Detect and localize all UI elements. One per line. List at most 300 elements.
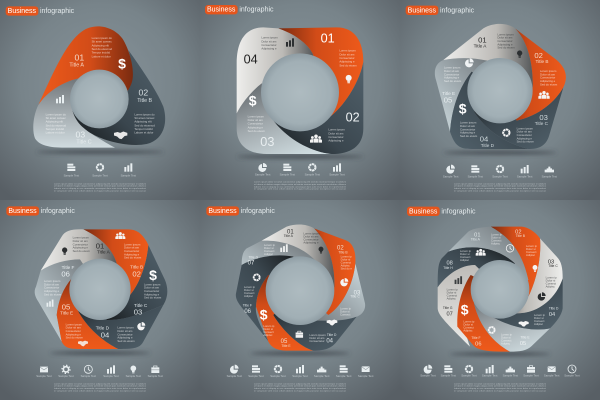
footer item 6 <box>523 366 539 378</box>
text block 01: Sed do eiusm <box>339 63 357 67</box>
segment 07 white <box>438 265 500 347</box>
footer paragraph: laboris nisi ut aliquip ex ea commodo consequat duis aute irure dolor in reprehenderit <box>454 387 546 390</box>
footer item 1: Sample Text <box>36 374 52 378</box>
panel background <box>0 0 200 200</box>
label 03 Title C: 03 <box>354 290 361 296</box>
label 04 Title D: Title D <box>96 326 110 331</box>
text block 03: Consectetur <box>144 289 159 293</box>
ground shadow <box>250 352 350 355</box>
icon: handshake <box>78 341 88 346</box>
label 02 Title B <box>515 229 526 238</box>
footer item 2: Sample Text <box>468 174 483 178</box>
text block 03: Lorem ip <box>546 276 557 280</box>
segment 02 orange <box>83 229 148 295</box>
label 03 Title C: 03 <box>548 259 554 265</box>
panel: heptagon diagram <box>200 200 400 400</box>
text block 03: Lorem ipsum <box>248 114 265 118</box>
footer paragraph: in voluptate velit esse cillum dolore eu fugiat nulla pariatur excepteur sint occaecat <box>454 389 546 392</box>
text block 02: Consectetur <box>124 249 139 253</box>
footer item 2 <box>280 164 295 177</box>
text block 06: Dolor si <box>463 323 473 327</box>
footer item 1: Sample Text <box>64 173 79 177</box>
footer item 7 <box>358 366 374 378</box>
text block 06: Dolor si <box>244 288 254 292</box>
footer item 4: Sample Text <box>292 374 308 378</box>
text block B: Labore et dolor <box>134 131 153 135</box>
label 02 Title B <box>534 51 549 64</box>
center hole <box>261 53 339 131</box>
label 05 Title E <box>442 91 455 105</box>
text block 04: Dolor sit am <box>117 329 133 333</box>
segment 05 light blue <box>474 289 550 352</box>
label 02 Title B: Title B <box>137 98 153 104</box>
text block 06: Lorem ip <box>463 320 475 324</box>
text block 02: Sed do e <box>341 266 352 270</box>
segment 03 light <box>300 263 365 321</box>
icon: donut <box>489 327 495 333</box>
text block 01: Consectetur <box>73 242 88 246</box>
text block 08: Adipisc <box>460 258 470 262</box>
text block 04: Dolor sit am <box>261 39 277 43</box>
label 03 Title C: Title C <box>548 264 558 268</box>
text block 06: Adipisc <box>463 329 473 333</box>
segment 06 dark <box>236 255 300 343</box>
header: Business infographic <box>205 5 274 14</box>
label 03 Title C: 03 <box>539 113 548 122</box>
label 04 Title D: 04 <box>101 330 110 339</box>
header: Business infographic: infographic <box>41 208 75 215</box>
label 01 Title A <box>69 53 84 69</box>
text block 08: Dolor si <box>460 252 470 256</box>
header: Business infographic: infographic <box>40 8 75 15</box>
label 03 Title C <box>134 303 148 317</box>
text block C: Labore et dolor <box>46 131 65 135</box>
icon: case <box>296 331 303 338</box>
label 01 Title A: 01 <box>75 53 84 63</box>
text block 02: Dolor si <box>341 257 351 261</box>
text block 07: Dolor si <box>447 290 457 294</box>
footer paragraph: ut labore et dolore magna aliqua enim ad minim veniam quis nostrud exercitation ullamco <box>454 185 547 188</box>
text block 05: Consectetur <box>66 329 81 333</box>
footer item 3 <box>81 365 96 378</box>
label 06 Title F: 06 <box>61 270 70 279</box>
segment 01 orange <box>278 27 363 116</box>
text block 07: Consect <box>447 293 457 297</box>
footer item 1: Sample Text <box>255 173 271 177</box>
footer paragraph: ut labore et dolore magna aliqua enim ad minim veniam quis nostrud exercitation ullamco <box>254 385 347 388</box>
icon: donut <box>503 129 509 136</box>
segment 05 orange <box>256 275 313 351</box>
text block C: Sit amet consec <box>46 116 66 120</box>
text block 04: Dolor sit am <box>309 336 325 340</box>
icon: chart <box>47 300 53 307</box>
label 01 Title A <box>284 229 294 238</box>
header: Business infographic <box>6 6 75 16</box>
label 02 Title B <box>137 88 153 104</box>
footer paragraph: ut labore et dolore magna aliqua enim ad minim veniam quis nostrud exercitation ullamco <box>54 385 147 388</box>
footer item 4: Sample Text <box>517 174 533 178</box>
label 01 Title A <box>96 242 111 255</box>
text block 06: Consectetur <box>44 286 59 290</box>
segment 05 orange <box>57 278 118 349</box>
footer paragraph: laboris nisi ut aliquip ex ea commodo consequat duis aute irure dolor in reprehenderit <box>54 187 146 190</box>
footer item 4 <box>292 365 308 378</box>
text block 03: Adipisc <box>546 285 555 289</box>
text block A: Sed do eiusmod <box>92 47 113 51</box>
label 01 Title A: Title A <box>474 44 487 49</box>
footer item 5 <box>314 367 330 378</box>
text block 02: Sed do eiusm <box>540 82 558 86</box>
text block 06: Lorem ipsum <box>44 279 61 283</box>
label 01 Title A: Title A <box>471 237 481 241</box>
label 04 Title D <box>96 326 110 339</box>
text block 06: Adipiscing e <box>44 289 60 293</box>
text block 02: Consectetur <box>328 135 344 139</box>
label 02 Title B: Title B <box>535 59 549 64</box>
panel: hexagon diagram <box>0 200 200 400</box>
footer item 4: Sample Text <box>103 374 119 378</box>
label 07 Title G: Title G <box>443 306 453 310</box>
footer paragraph: laboris nisi ut aliquip ex ea commodo consequat duis aute irure dolor in reprehenderit <box>254 387 346 390</box>
center hole <box>467 58 533 123</box>
icon: pie <box>465 58 474 67</box>
footer item 5 <box>126 365 141 378</box>
icon: chart dark <box>455 276 462 284</box>
footer item 2 <box>248 365 264 378</box>
text block 01: Lorem ipsum <box>73 236 90 240</box>
label 02 Title B: 02 <box>534 51 543 60</box>
footer item 1: Sample Text <box>227 374 242 378</box>
label 01 Title A: 01 <box>287 229 294 235</box>
footer item 1 <box>64 164 79 177</box>
label 07 Title G <box>248 256 259 266</box>
text block 05: Dolor sit am <box>66 326 81 330</box>
label 02: 02 <box>346 111 360 125</box>
icon: pie <box>340 278 348 286</box>
label 07 Title G: 07 <box>447 311 453 317</box>
center hole <box>266 256 334 325</box>
footer item 8: Sample Text <box>564 374 580 378</box>
text block 03: Dolor sit am <box>248 118 263 122</box>
segment 01 white <box>41 229 117 289</box>
footer item 1: Sample Text <box>443 174 459 178</box>
footer item 8 <box>564 365 580 378</box>
icon: people <box>538 91 550 99</box>
text block 05: Lorem ip <box>501 332 512 336</box>
segment 01 white <box>443 24 533 91</box>
footer paragraph: ut labore et dolore magna aliqua enim ad minim veniam quis nostrud exercitation ullamco <box>54 185 147 188</box>
icon: dollar: $ <box>149 267 157 283</box>
footer paragraph: Lorem ipsum dolor sit amet consectetur adipiscing elit sed do eiusmod tempor incididunt <box>54 382 146 385</box>
label 06 Title F: Title F <box>62 265 75 270</box>
icon: chart dark <box>286 38 294 47</box>
text block 05: Consect <box>263 330 274 334</box>
text block 02: Dolor si <box>526 247 536 251</box>
header: Business infographic: Business <box>8 208 37 215</box>
label 02 Title B: 02 <box>515 229 521 235</box>
icon: donut <box>254 274 260 280</box>
center hole <box>471 260 529 319</box>
icon: people <box>476 249 486 256</box>
header: Business infographic <box>406 6 475 15</box>
icon: bulb dark <box>62 247 67 255</box>
text block 01: Lorem ipsum <box>303 231 320 235</box>
footer item 2: Sample Text <box>92 173 108 177</box>
text block 02: Dolor sit am <box>124 246 140 250</box>
segment 05 light <box>435 58 500 132</box>
text block 07: Adipisc <box>447 296 456 300</box>
header: Business infographic: Business <box>8 8 37 15</box>
icon: handshake <box>519 321 529 327</box>
text block 05: Adipisc <box>263 333 273 337</box>
segment 04 dark <box>78 289 163 349</box>
panel background <box>200 200 400 400</box>
text block 05: Lorem ipsum <box>66 322 83 326</box>
text block B: Sit amet consec <box>134 116 155 120</box>
panel: pentagon diagram <box>400 0 600 200</box>
icon: people <box>115 232 125 239</box>
ground shadow <box>450 352 550 356</box>
ground shadow <box>443 151 557 154</box>
label 07 Title G: 07 <box>248 260 255 266</box>
footer paragraph: ut labore et dolore magna aliqua enim ad minim veniam quis nostrud exercitation ullamco <box>254 183 347 186</box>
text block 05: Dolor si <box>263 327 273 331</box>
footer item 1 <box>227 365 242 378</box>
text block A: Lorem ipsum do <box>92 36 112 40</box>
label 07 Title G: Title G <box>248 256 259 260</box>
text block 07: Dolor si <box>264 246 274 250</box>
label 06 Title F <box>243 304 252 315</box>
text block 03: Lorem ip <box>340 306 351 310</box>
footer paragraph: ut labore et dolore magna aliqua enim ad minim veniam quis nostrud exercitation ullamco <box>454 385 547 388</box>
text block 04: Adipiscing e <box>117 336 133 340</box>
label 07 Title G <box>443 306 453 317</box>
label 01: 01 <box>321 31 335 45</box>
text block A: Labore et dolor <box>92 54 111 58</box>
text block 03: Sed do eiusm <box>517 140 535 144</box>
label 05 Title E: Title E <box>60 311 73 316</box>
label 04 Title D: Title D <box>481 143 495 148</box>
text block 02: Dolor sit am <box>540 72 556 76</box>
label 04: 04 <box>244 52 258 66</box>
text block 05: Lorem ipsum <box>444 66 461 70</box>
segment 04 dark <box>478 278 563 329</box>
footer item 5 <box>503 367 518 378</box>
footer item 1 <box>443 165 459 178</box>
text block 03: Sed do eiusm <box>248 129 266 133</box>
header: Business infographic: infographic <box>441 208 476 215</box>
icon: dollar: $ <box>461 302 469 318</box>
footer item 4 <box>517 165 533 178</box>
label 01 Title A <box>471 233 481 241</box>
text block 06: Lorem ip <box>244 285 255 289</box>
header: Business infographic: infographic <box>241 208 275 215</box>
segment 06 grey <box>35 259 100 342</box>
label 03 Title C: Title C <box>535 121 549 126</box>
label 01 Title A: 01 <box>478 36 487 45</box>
text block 05: Consect <box>501 338 512 342</box>
footer item 4 <box>103 365 119 378</box>
footer item 6 <box>336 365 352 378</box>
label 05 Title E <box>520 336 530 347</box>
footer paragraph: Lorem ipsum dolor sit amet consectetur adipiscing elit sed do eiusmod tempor incididunt <box>254 181 346 184</box>
footer paragraph: in voluptate velit esse cillum dolore eu fugiat nulla pariatur excepteur sint occaecat <box>254 188 346 191</box>
text block 06: Consect <box>463 326 474 330</box>
panel: triangle diagram <box>0 0 200 200</box>
text block 02: Consect <box>341 260 351 264</box>
footer item 2: Sample Text <box>280 173 295 177</box>
text block 01: Adipisc <box>491 241 501 245</box>
text block B: Sed do eiusmod <box>134 123 155 127</box>
icon: dollar: $ <box>459 100 467 116</box>
label 06 Title F: Title F <box>471 336 481 340</box>
icon: bulb <box>346 75 352 83</box>
footer paragraph: laboris nisi ut aliquip ex ea commodo consequat duis aute irure dolor in reprehenderit <box>54 387 146 390</box>
text block 02: Adipiscing e <box>124 252 140 256</box>
text block 04: Dolor si <box>534 316 544 320</box>
footer item 2 <box>468 165 483 178</box>
label 06 Title F <box>471 336 481 348</box>
text block 05: Dolor si <box>501 335 511 339</box>
footer item 3: Sample Text <box>492 174 508 178</box>
segment 08 dark <box>438 247 515 289</box>
text block 05: Adipiscing e <box>66 332 81 336</box>
segment 03 black <box>474 87 563 149</box>
text block 07: Lorem ip <box>447 287 458 291</box>
label 03 Title C <box>548 259 558 268</box>
text block 03: Sed do eiusm <box>144 296 162 300</box>
text block 02: Consect <box>526 250 537 254</box>
text block 04: Lorem ipsum <box>261 36 278 40</box>
text block 01: Adipiscing e <box>339 60 355 64</box>
footer paragraph: Lorem ipsum dolor sit amet consectetur adipiscing elit sed do eiusmod tempor incididunt <box>254 382 346 385</box>
icon: clock <box>506 245 514 252</box>
label 01 Title A: 01 <box>474 233 480 239</box>
label 06 Title F: 06 <box>475 342 481 348</box>
text block 04: Adipiscing e <box>261 47 277 51</box>
label 02 Title B <box>130 265 143 279</box>
header: Business infographic <box>407 207 476 216</box>
label 02 Title B: Title B <box>338 251 348 255</box>
footer item 6: Sample Text <box>148 374 163 378</box>
label 01 Title A: Title A <box>69 63 84 69</box>
text block 02: Adipisc <box>341 263 350 267</box>
segment 03 white <box>500 238 563 313</box>
footer paragraph: in voluptate velit esse cillum dolore eu fugiat nulla pariatur excepteur sint occaecat <box>54 189 146 192</box>
icon: dollar: $ <box>249 92 257 108</box>
header: Business infographic <box>206 206 275 216</box>
text block B: Adipiscing elit <box>134 120 152 124</box>
segment 01 white <box>262 225 334 291</box>
footer item 1: Sample Text <box>420 374 436 378</box>
label 02 Title B: 02 <box>337 246 344 252</box>
icon: bulb dark <box>319 247 323 253</box>
label 04 Title D <box>549 307 559 318</box>
label 06 Title F: 06 <box>244 309 252 315</box>
text block 08: Consect <box>460 255 471 259</box>
segment 01 orange <box>38 26 133 105</box>
icon: chart <box>280 244 288 252</box>
footer paragraph: Lorem ipsum dolor sit amet consectetur adipiscing elit sed do eiusmod tempor incididunt <box>54 182 146 185</box>
header: Business infographic: Business <box>408 7 437 14</box>
text block 03: Adipiscing e <box>248 125 263 129</box>
label 04 Title D: Title D <box>549 307 559 311</box>
text block 01: Dolor sit am <box>303 234 319 238</box>
label 04 Title D: 04 <box>480 135 489 144</box>
icon: pie dark <box>538 292 546 301</box>
footer item 3 <box>270 366 286 378</box>
footer item 5: Sample Text <box>542 174 557 178</box>
header: Business infographic: Business <box>207 7 236 14</box>
text block 03: Consect <box>340 312 351 316</box>
segment 03 grey <box>33 78 115 148</box>
segment 04 light <box>237 27 313 113</box>
text block 04: Dolor sit am <box>460 124 476 128</box>
label 02 Title B: Title B <box>516 234 526 238</box>
text block 05: Adipiscing e <box>444 76 460 80</box>
text block 04: Adipiscing e <box>460 131 476 135</box>
panel: octagon diagram <box>400 200 600 400</box>
footer paragraph: in voluptate velit esse cillum dolore eu fugiat nulla pariatur excepteur sint occaecat <box>254 389 346 392</box>
text block 01: Dolor si <box>491 235 501 239</box>
text block 04: Sed do eiusm <box>117 339 135 343</box>
text block C: Lorem ipsum do <box>46 112 66 116</box>
text block 07: Consect <box>264 249 275 253</box>
label 05 Title E: 05 <box>62 303 70 312</box>
text block 06: Adipisc <box>244 294 254 298</box>
text block 01: Adipiscing e <box>497 42 513 46</box>
segment 04 dark <box>450 72 528 149</box>
label 03 Title C <box>76 129 92 145</box>
label 08 Title H: Title H <box>443 266 453 270</box>
text block 01: Dolor sit am <box>73 239 88 243</box>
footer item 4: Sample Text <box>482 374 498 378</box>
label 03: 03 <box>260 135 274 149</box>
text block 02: Lorem ipsum <box>540 69 557 73</box>
text block 05: Adipisc <box>501 341 511 345</box>
panel background <box>0 200 200 400</box>
footer item 3 <box>492 166 508 178</box>
text block 08: Lorem ip <box>460 249 471 253</box>
text block 05: Consectetur <box>444 72 459 76</box>
label 05 Title E: 05 <box>520 341 526 347</box>
label 03 Title C: Title C <box>134 303 148 308</box>
footer item 3: Sample Text <box>81 374 96 378</box>
segment 02 orange <box>491 227 540 297</box>
text block 03: Consectetur <box>248 122 263 126</box>
header: Business infographic: infographic <box>440 7 475 14</box>
panel background <box>200 0 400 200</box>
text block 05: Sed do eiusm <box>444 79 462 83</box>
segment 01 light blue <box>448 227 528 289</box>
text block 02: Consectetur <box>540 76 555 80</box>
label 03 Title C <box>535 113 549 126</box>
label 05 Title E: 05 <box>444 96 452 105</box>
footer item 3 <box>461 366 477 378</box>
segment 02 orange <box>300 228 355 315</box>
footer item 7: Sample Text <box>358 374 374 378</box>
segment 04 dark <box>273 291 357 351</box>
footer item 3: Sample Text <box>121 173 136 177</box>
label 05 Title E: Title E <box>520 336 530 340</box>
text block 03: Dolor sit am <box>144 286 160 290</box>
text block 03: Lorem ipsum <box>517 126 534 130</box>
footer item 5: Sample Text <box>314 374 330 378</box>
text block 03: Adipiscing e <box>517 136 532 140</box>
footer item 4 <box>482 365 498 378</box>
text block B: Tempor incidid <box>134 127 153 131</box>
text block 04: Sed do eiusm <box>460 134 478 138</box>
